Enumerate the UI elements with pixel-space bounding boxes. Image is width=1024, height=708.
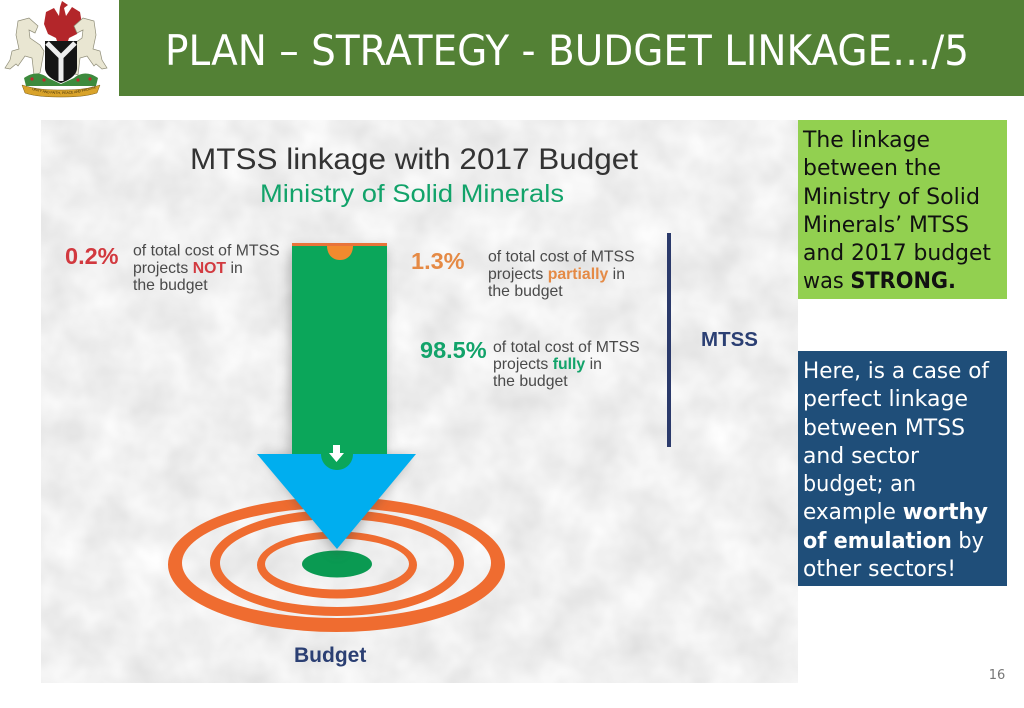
eagle (44, 1, 82, 44)
stat: 1.3 percent partially in budget: projects partially in (488, 266, 625, 283)
stat: 98.5 percent fully in budget: projects fully in (493, 356, 602, 373)
callout: perfect linkage: perfect linkage (803, 386, 968, 412)
chart title: MTSS linkage with 2017 Budget (190, 143, 638, 176)
callout: linkage strong (798, 120, 1007, 299)
page number: 16 (989, 668, 1005, 683)
callout: perfect linkage: Here, is a case of (803, 358, 990, 384)
budget label: Budget (294, 644, 366, 667)
stat: 98.5 percent fully in budget (420, 337, 640, 390)
stat: 98.5 percent fully in budget: of total cost of MTSS (493, 339, 640, 356)
grass base (24, 73, 98, 86)
stat: 1.3 percent partially in budget: of total cost of MTSS (488, 248, 635, 266)
arrow shadow (262, 250, 412, 555)
callout: perfect linkage: example worthy (803, 499, 988, 525)
arrow: green shaft (292, 243, 387, 455)
right horse (68, 18, 107, 75)
infographic panel: MTSS linkage (41, 120, 798, 683)
stat: 1.3 percent partially in budget: 1.3% (411, 248, 465, 274)
callout: perfect linkage: of emulation by (803, 528, 984, 554)
callout: linkage strong: Ministry of Solid (803, 184, 980, 210)
stat: 1.3 percent partially in budget (411, 248, 635, 300)
icon: small white arrow (329, 445, 344, 462)
stat: 0.2 percent not in budget: the budget (133, 277, 208, 294)
stat: 0.2 percent not in budget (65, 242, 280, 294)
target rings (168, 497, 505, 632)
MTSS bracket line (667, 233, 671, 447)
stat: 98.5 percent fully in budget: 98.5% (420, 337, 487, 363)
callout: linkage strong: The linkage (802, 127, 930, 153)
callout: perfect linkage (798, 351, 1007, 586)
stat: 0.2 percent not in budget: 0.2% (65, 243, 119, 269)
stat: 98.5 percent fully in budget: the budget (493, 373, 568, 390)
shield (45, 41, 77, 83)
callout: linkage strong: between the (803, 155, 941, 181)
callout: perfect linkage: other sectors! (803, 556, 956, 582)
emblem: coat of arms (4, 1, 108, 98)
left horse (5, 18, 44, 75)
callout: linkage strong: was STRONG. (803, 268, 956, 294)
stat: 1.3 percent partially in budget: the budget (488, 283, 563, 300)
callout: perfect linkage: budget; an (803, 471, 916, 497)
callout: perfect linkage: between MTSS (803, 415, 965, 441)
MTSS label: MTSS (701, 328, 758, 351)
chart subtitle: Ministry of Solid Minerals (260, 180, 564, 208)
stat: 0.2 percent not in budget: of total cost of MTSS (133, 242, 280, 260)
callout: linkage strong: Minerals’ MTSS (803, 212, 969, 238)
header banner (119, 0, 1024, 96)
title: PLAN – STRATEGY - BUDGET LINKAGE…/5 (165, 26, 969, 75)
callout: linkage strong: and 2017 budget (803, 240, 991, 266)
arrow: blue head (257, 454, 416, 549)
target centre (302, 550, 372, 578)
callout: perfect linkage: and sector (803, 443, 920, 469)
stat: 0.2 percent not in budget: projects NOT in (133, 260, 243, 277)
